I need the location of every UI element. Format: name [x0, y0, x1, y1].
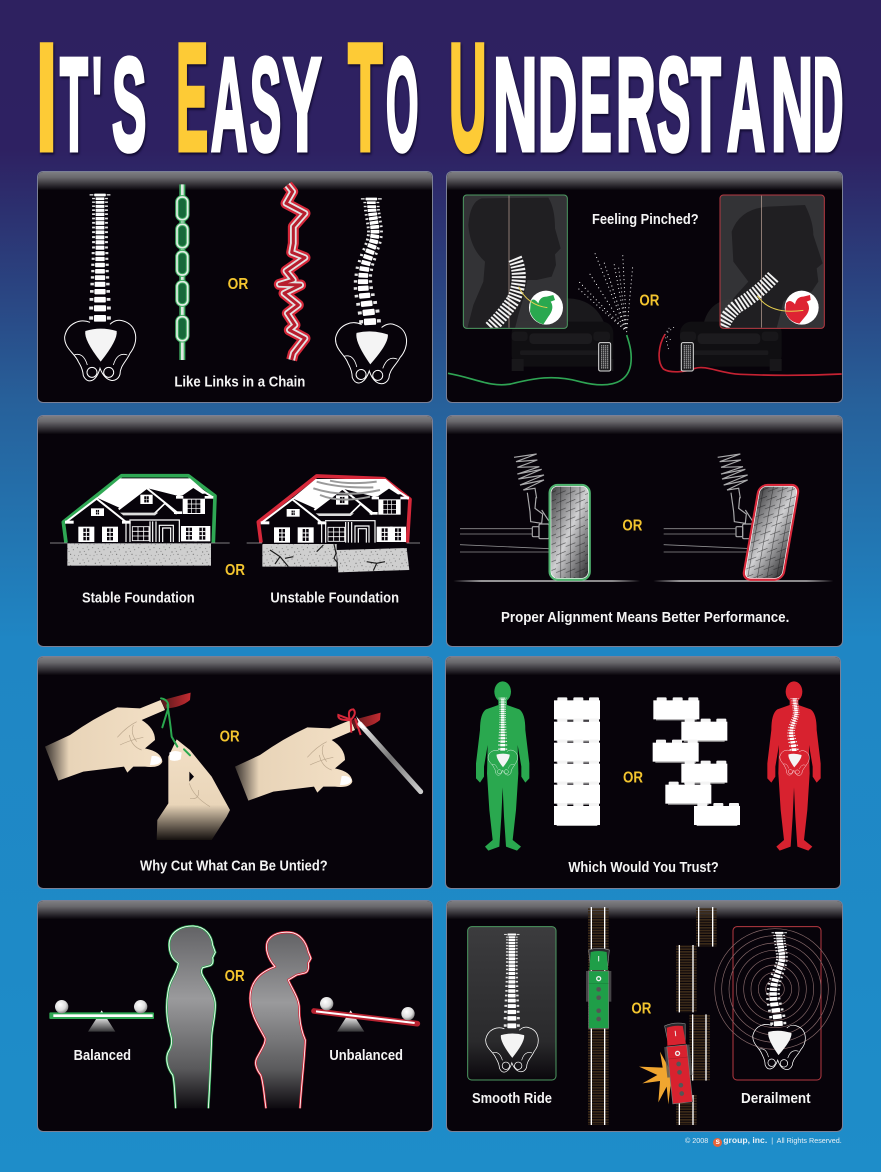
title: U	[449, 12, 486, 183]
green chain	[177, 184, 188, 360]
green body	[476, 681, 529, 851]
title: D	[813, 31, 844, 178]
title: D	[538, 31, 577, 178]
panel: like links in a chain	[38, 172, 432, 402]
copyright footer: © 2008 group, inc. | All Rights Reserved.	[685, 1135, 842, 1145]
copyright footer: s	[716, 1137, 720, 1146]
red chain	[279, 185, 305, 360]
stooped posture	[250, 932, 311, 1108]
lower hand	[157, 739, 230, 840]
title: S	[657, 31, 690, 178]
straight tyre	[550, 485, 590, 580]
misaligned blocks	[653, 697, 740, 826]
red body	[767, 681, 821, 851]
curved spine	[333, 198, 407, 385]
or label: OR	[228, 276, 248, 293]
plugs	[599, 343, 693, 371]
or label: OR	[623, 769, 643, 786]
title: S	[250, 31, 281, 178]
caption: Why Cut What Can Be Untied?	[140, 859, 328, 875]
panel: foundation	[38, 416, 432, 646]
panel: which would you trust	[446, 657, 840, 888]
title: A	[210, 31, 247, 178]
caption: stable: Stable Foundation	[82, 591, 195, 607]
caption: Which Would You Trust?	[568, 860, 719, 876]
car right	[680, 298, 782, 371]
or label: OR	[639, 293, 659, 310]
tilted see-saw	[314, 997, 417, 1032]
broken track	[676, 907, 717, 1125]
car left	[512, 298, 613, 371]
balanced see-saw	[49, 1000, 154, 1032]
title: Y	[283, 31, 321, 178]
title: S	[112, 31, 146, 178]
nerve spray right	[665, 326, 676, 350]
suspension right	[664, 454, 753, 552]
stacked blocks	[554, 697, 600, 826]
panel: feeling pinched	[447, 172, 842, 402]
title	[36, 12, 844, 183]
unstable house	[247, 476, 420, 572]
panel: alignment	[447, 416, 842, 646]
caption: balanced: Balanced	[74, 1048, 131, 1064]
straight track	[588, 907, 609, 1125]
red wire	[659, 334, 842, 375]
caption: derailment: Derailment	[741, 1091, 811, 1107]
or label: OR	[225, 562, 245, 579]
card: derailment	[715, 927, 835, 1080]
nerve spray left	[577, 251, 633, 332]
panel: balanced	[38, 901, 432, 1131]
green body spine	[488, 698, 518, 775]
title: T	[60, 31, 87, 178]
panel: smooth ride or derailment	[447, 901, 842, 1131]
title: N	[493, 31, 537, 178]
or label: OR	[631, 1001, 651, 1018]
ground lines	[453, 580, 833, 582]
red body spine	[779, 698, 810, 776]
title: '	[92, 31, 102, 178]
caption: unbalanced: Unbalanced	[329, 1048, 403, 1064]
scalpel	[356, 716, 421, 792]
caption: Proper Alignment Means Better Performance.	[501, 610, 789, 626]
stable house	[50, 476, 230, 566]
title: O	[386, 31, 418, 178]
card: healthy neck	[463, 195, 567, 328]
title: I	[36, 12, 57, 183]
card: smooth ride	[468, 927, 556, 1080]
title: T	[690, 31, 720, 178]
title: R	[616, 31, 656, 178]
impact burst	[639, 1052, 671, 1104]
caption: Feeling Pinched?	[592, 212, 699, 228]
suspension left	[460, 454, 549, 552]
caption: unstable: Unstable Foundation	[270, 591, 399, 607]
red bow	[338, 709, 361, 735]
title: E	[176, 12, 208, 183]
tilted tyre	[743, 485, 799, 580]
upright posture highlight	[167, 926, 215, 1108]
right hand	[235, 713, 381, 801]
title: E	[580, 31, 612, 178]
or label: OR	[220, 729, 240, 746]
upright posture	[167, 926, 215, 1108]
panel: why cut	[38, 657, 432, 888]
green train	[586, 948, 611, 1028]
left hand	[45, 693, 191, 781]
title: A	[727, 31, 765, 178]
straight spine	[65, 194, 136, 381]
or label: OR	[622, 518, 642, 535]
or label: OR	[225, 968, 245, 985]
stooped posture highlight	[250, 932, 311, 1108]
caption: smooth ride: Smooth Ride	[472, 1091, 552, 1107]
card: pinched neck	[720, 195, 824, 328]
title: N	[771, 31, 813, 178]
red train	[662, 1022, 695, 1104]
green string	[161, 698, 190, 755]
green wire	[448, 335, 631, 385]
caption: Like Links in a Chain	[174, 375, 305, 391]
title: T	[348, 12, 383, 183]
